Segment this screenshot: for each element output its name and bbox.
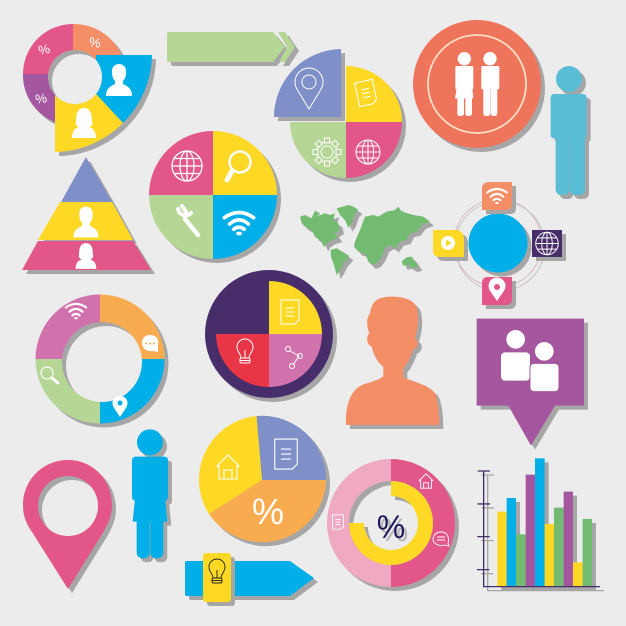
- icon: document: [333, 515, 343, 529]
- icon: magnifier: [227, 152, 250, 180]
- dark purple circle with three slices: [205, 270, 333, 398]
- icon: document: [275, 439, 297, 469]
- three-tier pyramid: [22, 157, 151, 270]
- slice: yellow: [269, 281, 322, 334]
- icon: gear: [313, 138, 341, 166]
- blue arrow with bulb tab: [185, 553, 314, 602]
- icon: chat: [142, 335, 158, 352]
- hub blue circle: [468, 214, 528, 272]
- icon: share nodes: [286, 346, 302, 368]
- half ring: pink: [391, 459, 455, 587]
- icon: magnifier: [41, 367, 58, 383]
- ring segment: pink percent: [23, 24, 73, 74]
- slice: orange: [209, 480, 326, 542]
- icon: man bust: [74, 207, 98, 237]
- cream ring: [428, 35, 526, 133]
- slice: yellow: [213, 131, 277, 195]
- icon: man bust: [106, 64, 132, 96]
- wedge: yellow with woman: [55, 94, 123, 152]
- purple speech box with people: [477, 319, 584, 446]
- icon: couple figures: [455, 52, 499, 116]
- blue standing woman: [132, 429, 168, 558]
- tier: pink: [22, 241, 151, 270]
- slice: blue: [213, 195, 277, 259]
- icon: woman bust: [72, 108, 96, 138]
- ring segment: green: [36, 359, 100, 424]
- green chevron arrow banner: [167, 32, 295, 62]
- percent shadow: %: [380, 512, 408, 548]
- four-quadrant pie, centre left: [149, 131, 277, 259]
- percent donut, bottom centre: [327, 459, 455, 587]
- axes and ticks: [477, 471, 600, 587]
- slice: green: [149, 195, 213, 259]
- donut with icons, lower left: [36, 294, 164, 424]
- ring segment: blue: [100, 359, 164, 424]
- icon: globe: [356, 140, 380, 164]
- wedge: blue with man: [96, 55, 152, 123]
- percent labels: %: [34, 90, 48, 107]
- bars: [497, 458, 592, 587]
- icon: bulb: [237, 339, 253, 363]
- icon: document: [355, 79, 377, 107]
- percent labels: %: [37, 41, 52, 58]
- tile: yellow play: [433, 230, 464, 257]
- icon: wifi: [224, 212, 254, 234]
- slice: yellow: [346, 66, 402, 122]
- ring segment: purple percent: [23, 74, 58, 124]
- slice: pink: [346, 122, 402, 178]
- icon: chat: [433, 532, 449, 546]
- icon: house: [216, 455, 240, 479]
- icon: woman bust: [76, 243, 96, 269]
- tile: dark globe: [532, 230, 562, 257]
- yellow tab: [203, 553, 231, 602]
- thin orbit rings: [454, 199, 545, 291]
- slice: red: [216, 334, 269, 387]
- bar chart: [477, 458, 600, 587]
- ring chart with people wedges, top left: [23, 24, 152, 152]
- tile: pink pin: [482, 277, 512, 305]
- icon: pin outline: [295, 68, 323, 109]
- icon: wrench: [178, 206, 198, 235]
- world map: [300, 205, 430, 275]
- half ring: pale pink: [327, 459, 391, 587]
- percent labels: [34, 34, 102, 107]
- slice: green: [290, 122, 346, 178]
- tier: periwinkle top: [61, 157, 112, 202]
- icon: pin: [112, 396, 128, 417]
- tile: orange wifi: [482, 182, 512, 210]
- pie chart with house, document and percent: [199, 416, 326, 542]
- yellow progress arc: [349, 481, 433, 565]
- ring segment: orange percent: [73, 24, 124, 60]
- pink location pin: [23, 460, 112, 589]
- orange circle with couple: [413, 20, 541, 148]
- slice: periwinkle: [256, 416, 326, 480]
- orange person bust silhouette: [346, 297, 439, 425]
- teal standing person: [551, 66, 587, 195]
- icon: globe: [172, 151, 202, 181]
- arrow body: [185, 561, 314, 596]
- slice: raised periwinkle: [274, 49, 341, 117]
- icon: bulb: [209, 559, 225, 583]
- icon: document: [281, 300, 299, 324]
- ring segment: orange: [100, 294, 164, 359]
- icon: wifi: [66, 304, 86, 318]
- hub diagram with four icon tiles: [433, 182, 562, 305]
- percent sign: %: [252, 491, 284, 532]
- icon: house: [419, 474, 433, 488]
- percent sign: %: [377, 509, 405, 545]
- slice: pink: [149, 131, 213, 195]
- tier: yellow: [38, 202, 133, 240]
- quarter pie with raised pin wedge, top centre: [274, 49, 402, 178]
- icon: two people: [501, 330, 559, 392]
- slice: yellow: [199, 416, 262, 514]
- percent labels: %: [88, 34, 102, 51]
- ring segment: magenta: [36, 294, 100, 359]
- slice: pink: [269, 334, 322, 387]
